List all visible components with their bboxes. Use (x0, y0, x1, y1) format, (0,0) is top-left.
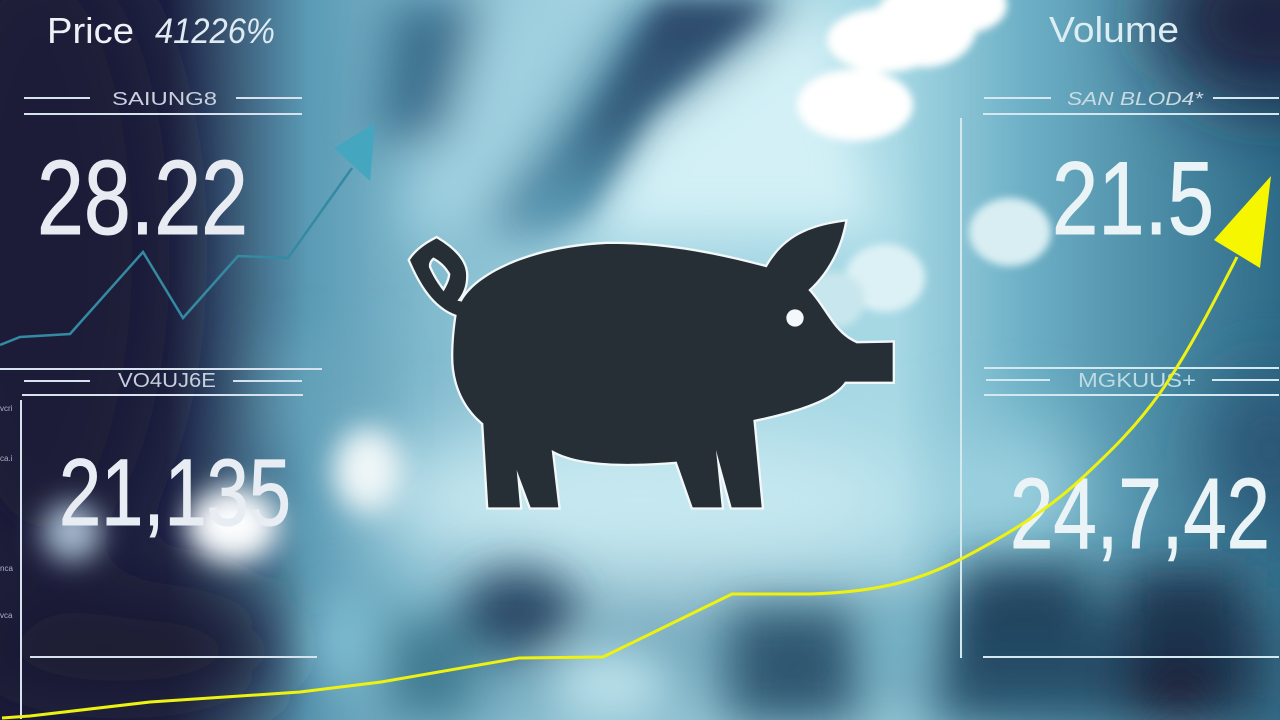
icon: pig eye (786, 309, 804, 327)
axis labels: vcri (0, 404, 13, 413)
axis labels: nca (0, 564, 13, 573)
heading: Volume: Volume (1049, 9, 1179, 50)
icon: blue arrowhead (334, 123, 375, 181)
label: volume: VO4UJ6E (118, 370, 216, 392)
icon: pig silhouette (410, 222, 893, 507)
chart: yellow rising line (2, 176, 1271, 718)
panel: lower left metric (0, 369, 322, 719)
axis labels: vca (0, 611, 13, 620)
panel: top right metric (961, 89, 1279, 658)
axis labels (0, 404, 13, 620)
panel: price header (47, 10, 275, 51)
number: 28.22: 28.22 (37, 139, 248, 257)
axis labels: ca.i (0, 454, 13, 463)
label: saving: SAIUNG8 (112, 89, 217, 109)
number: 21,135: 21,135 (59, 440, 291, 546)
label: lower right caption: MGKUUS+ (1078, 370, 1196, 392)
chart: blue rising line (0, 123, 375, 345)
label: top right caption: SAN BLOD4* (1067, 89, 1204, 109)
panel: lower right metric (983, 368, 1279, 657)
heading: Price: Price (47, 10, 134, 51)
panel: top left metric (24, 89, 302, 257)
number: 21.5: 21.5 (1052, 141, 1214, 257)
heading: price percentage: 41226% (155, 12, 275, 51)
icon: yellow arrowhead (1214, 176, 1271, 268)
